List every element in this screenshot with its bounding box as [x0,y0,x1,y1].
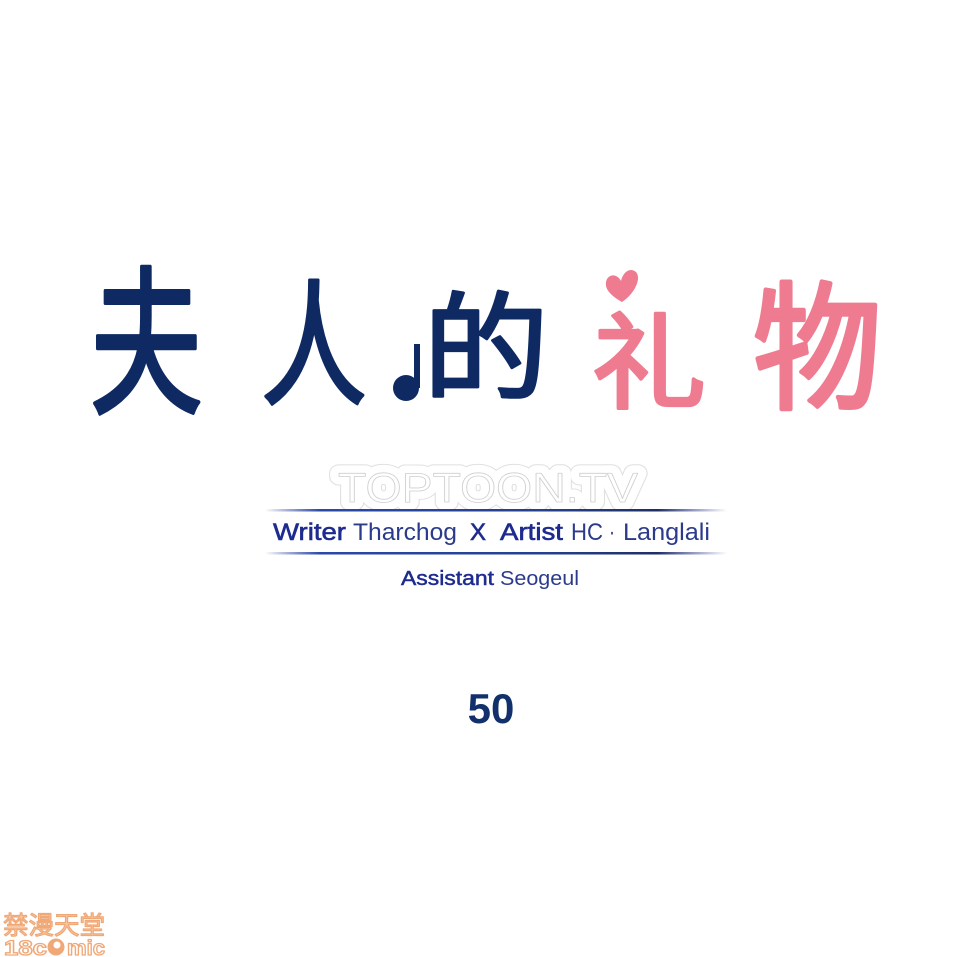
icon: music note [393,344,420,401]
watermark: TOPTOON.TV [338,464,638,511]
icon: heart [606,270,638,302]
logo: 18comic [3,912,105,957]
assistant credit: Assistant [401,568,494,590]
episode number: 50 [468,685,514,732]
assistant credit: Seogeul [500,568,579,590]
credits line: Tharchog [353,519,457,546]
assistant credit [401,568,579,590]
divider bottom [265,552,727,554]
title: pink characters: 物 [753,274,882,428]
title: pink characters [592,274,882,428]
credits line: HC [571,519,603,546]
credits line [273,519,710,546]
title: navy characters: 人 [261,271,367,423]
title: navy characters: 的 [423,284,549,415]
title: navy characters [90,258,549,436]
logo: 18comic: 禁漫天堂 [3,912,105,940]
credits line: Langlali [623,519,710,546]
title: pink characters: 礼 [592,307,706,423]
watermark: TOPTOON.TV [338,464,638,511]
credits line: Writer [273,519,346,546]
divider top [265,509,727,512]
credits line: X [470,519,486,546]
credits line: Artist [500,519,563,546]
watermark: TOPTOON.TV [338,464,638,511]
credits line: · [609,519,615,546]
title: navy characters: 夫 [90,258,203,436]
